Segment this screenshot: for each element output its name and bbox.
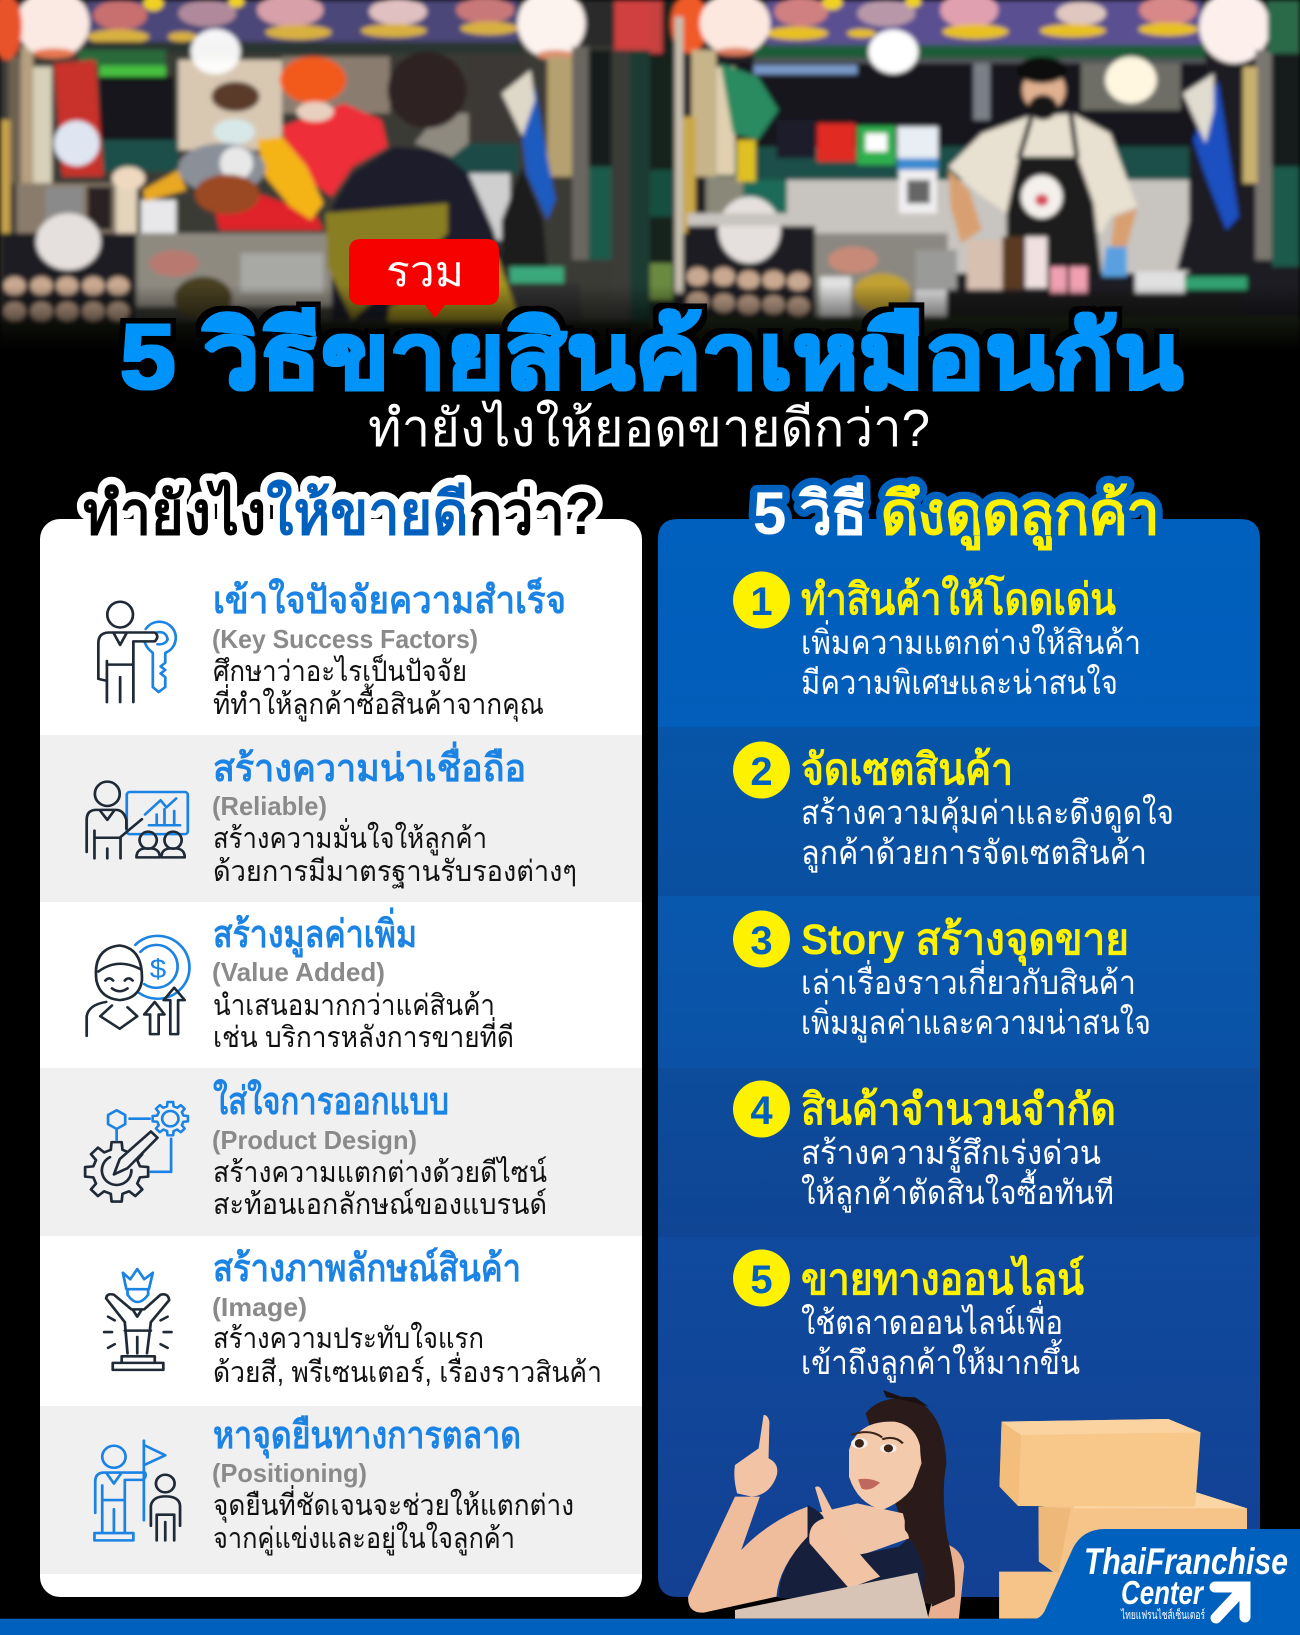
item text: เพิ่มความแตกต่างให้สินค้า (801, 620, 1141, 661)
row text: สร้างความประทับใจแรก (213, 1321, 484, 1355)
item text: จัดเซตสินค้า (801, 746, 1013, 794)
row text (212, 741, 577, 889)
item text: ใช้ตลาดออนไลน์เพื่อ (801, 1300, 1063, 1341)
row text: ศึกษาว่าอะไรเป็นปัจจัย (213, 653, 467, 688)
item text (801, 1254, 1085, 1383)
item text: ลูกค้าด้วยการจัดเซตสินค้า (801, 834, 1147, 873)
panel heading: 5 วิธี ดึงดูดลูกค้า (753, 480, 1160, 551)
item text (801, 916, 1151, 1043)
row text: สร้างความน่าเชื่อถือ (213, 741, 526, 790)
photo: two street food stalls (0, 0, 1300, 350)
panel heading: ทำยังไงให้ขายดีกว่า? (83, 478, 599, 547)
item text: มีความพิเศษและน่าสนใจ (801, 664, 1118, 701)
item text: ขายทางออนไลน์ (801, 1254, 1085, 1304)
item 1 (733, 572, 1141, 701)
row text: สร้างภาพลักษณ์สินค้า (213, 1247, 521, 1290)
row text: ใส่ใจการออกแบบ (213, 1079, 449, 1123)
number badge 3: 3 (750, 919, 773, 963)
number badge 3 (733, 910, 790, 968)
person in red (282, 103, 388, 197)
item text: สินค้าจำนวนจำกัด (801, 1086, 1116, 1134)
panel: how to sell better (40, 478, 642, 1597)
counter items (137, 233, 332, 307)
man from behind (332, 147, 514, 320)
item 2 (733, 742, 1174, 873)
row text: สร้างมูลค่าเพิ่ม (213, 907, 417, 958)
icon: presenter with chart (87, 782, 188, 858)
item text: เพิ่มมูลค่าและความน่าสนใจ (801, 1000, 1151, 1043)
row text: เช่น บริการหลังการขายที่ดี (213, 1017, 514, 1054)
item text: ทำสินค้าให้โดดเด่น (801, 573, 1117, 624)
woman (688, 1390, 964, 1619)
row text: ด้วยการมีมาตรฐานรับรองต่างๆ (213, 856, 577, 889)
title: 5 วิธีขายสินค้าเหมือนกัน (120, 306, 1183, 408)
row text: หาจุดยืนทางการตลาด (213, 1415, 521, 1459)
logo: ThaiFranchise Center: ไทยแฟรนไชส์เซ็นเตอร์ (1120, 1607, 1205, 1622)
row text: สะท้อนเอกลักษณ์ของแบรนด์ (213, 1188, 547, 1221)
item text: เข้าถึงลูกค้าให้มากขึ้น (801, 1339, 1080, 1383)
row 5: image (104, 1247, 602, 1389)
row text: (Key Success Factors) (212, 624, 478, 654)
number badge 5 (733, 1250, 790, 1306)
row text: สร้างความมั่นใจให้ลูกค้า (213, 818, 487, 856)
item 5 (733, 1250, 1085, 1383)
row text: จากคู่แข่งและอยู่ในใจลูกค้า (213, 1521, 515, 1556)
number badge 5: 5 (750, 1258, 773, 1302)
icon: logo arrow (1215, 1587, 1245, 1618)
row text (212, 1079, 547, 1221)
parcel boxes (999, 1419, 1247, 1619)
row 3: value added (87, 907, 514, 1054)
panel: 5 ways to attract customers (658, 480, 1260, 1597)
number badge 4 (733, 1080, 790, 1138)
logo: ThaiFranchise Center (1084, 1541, 1288, 1622)
row 2: reliable (87, 741, 577, 889)
row text (212, 1415, 574, 1556)
icon: gear and pencil (85, 1102, 188, 1202)
row text (212, 907, 514, 1054)
red speech bubble: รวม: รวม (386, 248, 464, 295)
icon: crowned figure on podium (104, 1269, 171, 1370)
icon: leader with flag and child (94, 1441, 180, 1540)
red speech bubble: รวม (349, 239, 499, 318)
item text: ให้ลูกค้าตัดสินใจซื้อทันที (801, 1169, 1114, 1213)
row text: (Positioning) (212, 1458, 367, 1488)
delivery app signs (776, 120, 815, 158)
icon: man with coin and up arrows (87, 936, 189, 1036)
item text (801, 746, 1174, 873)
row text (212, 577, 566, 722)
vendor with apron (949, 170, 982, 243)
row text: เข้าใจปัจจัยความสำเร็จ (213, 577, 566, 622)
grey row stripes (40, 735, 642, 1574)
item text (801, 573, 1141, 701)
row text: ที่ทำให้ลูกค้าซื้อสินค้าจากคุณ (213, 683, 544, 722)
right side of left stall (448, 143, 518, 173)
number badge 1 (733, 572, 790, 628)
item text: สร้างความรู้สึกเร่งด่วน (801, 1134, 1101, 1173)
row text: จุดยืนที่ชัดเจนจะช่วยให้แตกต่าง (213, 1485, 574, 1523)
logo: ThaiFranchise Center: Center (1121, 1574, 1205, 1611)
illustration: woman pointing up and parcel boxes (688, 1390, 1247, 1619)
number badge 2: 2 (750, 750, 773, 794)
row text: สร้างความแตกต่างด้วยดีไซน์ (213, 1155, 547, 1189)
item text: สร้างความคุ้มค่าและดึงดูดใจ (801, 794, 1174, 833)
icon: man with coin and up arrows: $ (150, 954, 166, 985)
row text: (Reliable) (212, 791, 327, 821)
bottom bar and logo tab (0, 1529, 1300, 1635)
right stall photo (650, 0, 1300, 350)
subtitle: ทำยังไงให้ยอดขายดีกว่า? (368, 399, 930, 458)
item 4 (733, 1080, 1116, 1213)
row text (212, 1247, 602, 1389)
row 1: key success factors (98, 577, 566, 722)
item 3 (733, 910, 1151, 1043)
row 6: positioning (94, 1415, 574, 1556)
number badge 4: 4 (750, 1089, 773, 1133)
row text: ด้วยสี, พรีเซนเตอร์, เรื่องราวสินค้า (213, 1352, 602, 1389)
left stall photo (0, 0, 650, 350)
icon: person and key (98, 602, 176, 702)
photo fade to black (0, 285, 1300, 351)
row 4: product design (85, 1079, 547, 1221)
row text: (Value Added) (212, 957, 385, 987)
laptop (735, 1573, 929, 1619)
row text: (Product Design) (212, 1125, 417, 1155)
item text: เล่าเรื่องราวเกี่ยวกับสินค้า (801, 960, 1136, 1001)
cook in yellow (216, 193, 323, 230)
row text: (Image) (212, 1292, 307, 1322)
row text: นำเสนอมากกว่าแค่สินค้า (213, 990, 495, 1022)
item text: Story สร้างจุดขาย (801, 916, 1129, 967)
panel background with row bands (658, 519, 1260, 1597)
panel background (40, 519, 642, 1597)
number badge 1: 1 (750, 580, 773, 624)
number badge 2 (733, 742, 790, 798)
item text (801, 1086, 1116, 1213)
